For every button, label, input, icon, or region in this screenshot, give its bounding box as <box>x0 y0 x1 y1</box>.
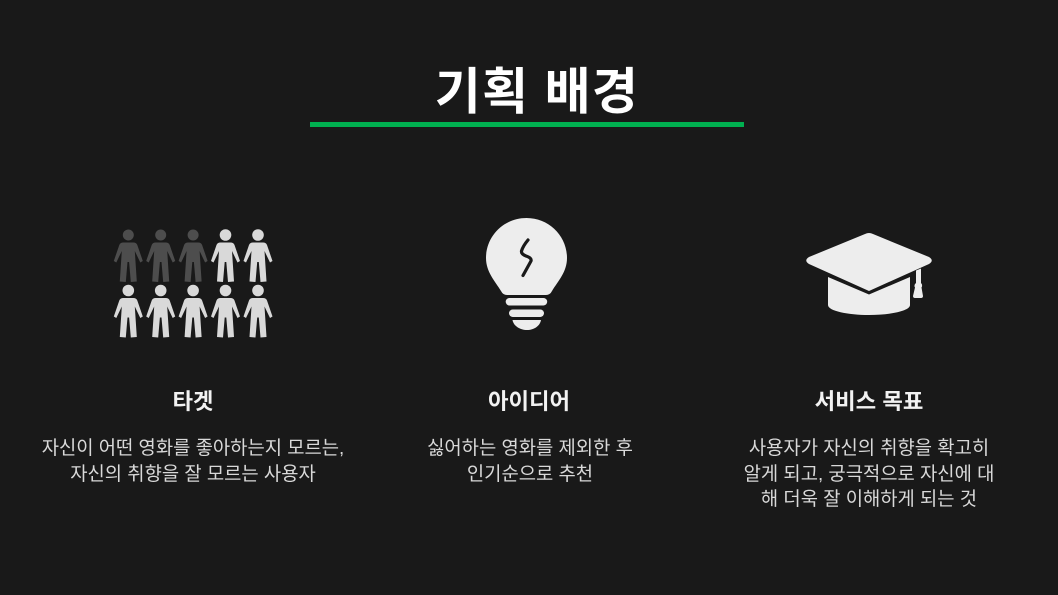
column: target heading: 타겟 <box>172 389 214 414</box>
column: service goal description: 사용자가 자신의 취향을 확고히 <box>749 437 989 458</box>
column: idea description <box>427 437 633 484</box>
column: idea description: 인기순으로 추천 <box>467 462 593 484</box>
icon: people <box>114 229 272 338</box>
icon: light bulb <box>486 218 567 330</box>
column: service goal heading: 서비스 목표 <box>815 389 923 414</box>
column: service goal description: 알게 되고, 궁극적으로 자신에 대 <box>744 462 994 484</box>
icon: graduation cap <box>806 233 932 315</box>
column: idea description: 싫어하는 영화를 제외한 후 <box>427 437 633 458</box>
column: target description: 자신이 어떤 영화를 좋아하는지 모르는, <box>42 437 344 458</box>
title underline <box>310 122 744 127</box>
column: target description <box>42 437 344 484</box>
column: service goal description: 해 더욱 잘 이해하게 되는 것 <box>761 488 977 509</box>
title: 기획 배경 <box>435 64 639 120</box>
column: target description: 자신의 취향을 잘 모르는 사용자 <box>70 462 316 484</box>
column: idea heading: 아이디어 <box>488 389 570 414</box>
column: service goal description <box>744 437 994 509</box>
